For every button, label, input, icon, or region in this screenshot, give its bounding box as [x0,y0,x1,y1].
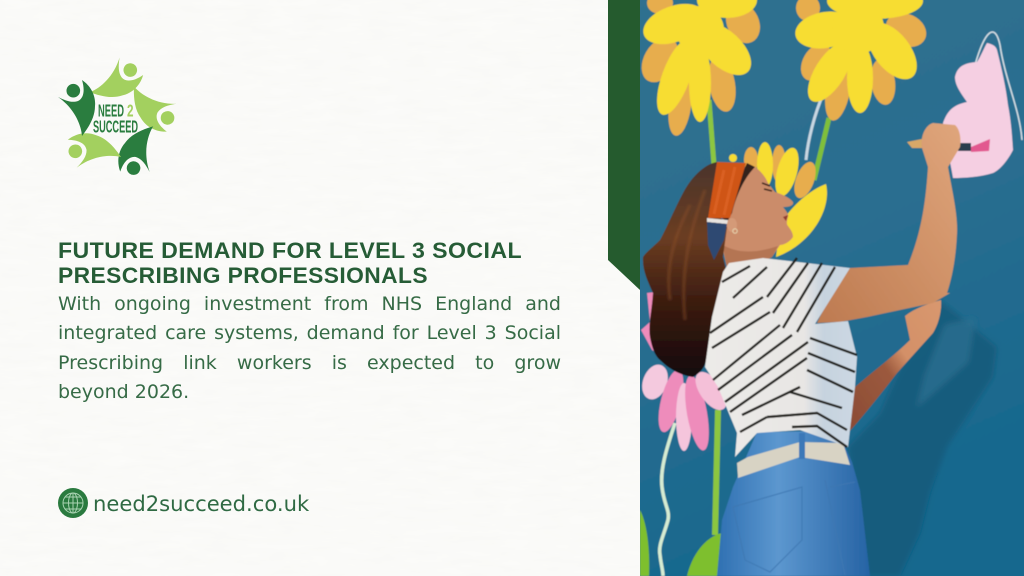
mural flower: pink blob being painted [943,43,1013,178]
mural flower 3 [729,142,827,257]
photo: woman painting a flower mural [634,0,1024,576]
heading: FUTURE DEMAND FOR LEVEL 3 SOCIAL [58,238,522,263]
woman: face and neck [722,167,793,268]
woman: headband [707,162,746,260]
mural leaves [640,510,722,576]
logo figure: lower left [60,127,125,180]
body text: Prescribing link workers is expected to grow [58,352,561,374]
heading: PRESCRIBING PROFESSIONALS [58,263,428,288]
woman: belt [737,433,850,478]
green accent band [608,0,640,290]
logo: Need 2 Succeed [58,52,186,186]
woman: ear and earring [727,218,737,233]
mural stems [660,32,1022,576]
wall [636,0,1024,576]
logo figure: bottom [110,119,173,186]
woman: raised arm [817,123,960,323]
logo figure: right [123,72,186,139]
woman: lower arm [848,300,941,433]
logo wordmark: NEED [98,100,124,120]
woman: jeans [717,431,870,576]
woman: hair [643,162,755,377]
mural flower 4: pink [638,292,733,452]
body text: beyond 2026. [58,381,189,403]
logo figure: left [58,80,95,136]
mural flower 2 [792,0,932,123]
logo wordmark [93,100,138,137]
heading [58,238,522,288]
body text [58,293,561,403]
mural flower 1 [634,0,766,137]
icon: globe [58,488,88,518]
logo wordmark: SUCCEED [93,117,138,137]
website url: need2succeed.co.uk [93,491,309,516]
paintbrush [907,139,990,152]
body text: integrated care systems, demand for Level 3 Social [58,322,561,344]
logo figure: top [82,52,147,105]
body text: With ongoing investment from NHS England and [58,293,561,315]
woman: striped shirt [705,258,857,457]
paper background [0,0,640,576]
logo wordmark: 2 [127,100,134,120]
wall shadow [848,300,997,576]
